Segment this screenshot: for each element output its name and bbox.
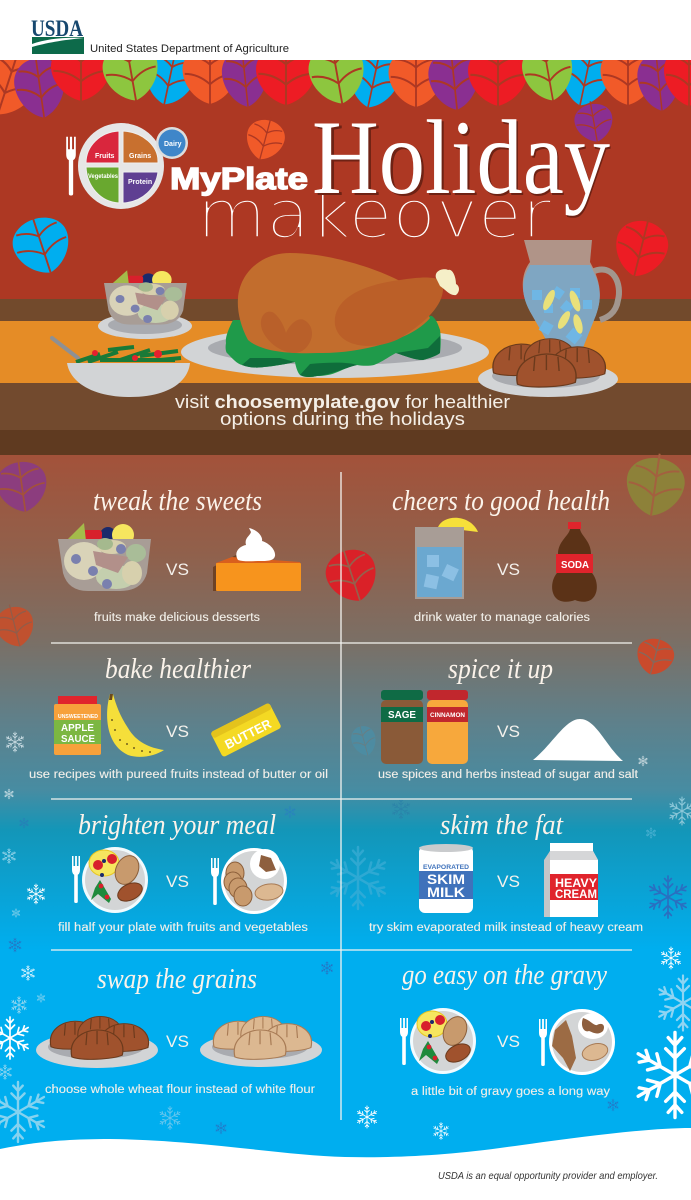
tip: tweak the sweets (58, 485, 301, 624)
vs: VS (166, 722, 189, 741)
dairy cup (156, 127, 188, 159)
caption: use recipes with pureed fruits instead of butter or oil (29, 769, 328, 781)
scattered hero leaves (5, 98, 674, 282)
department name: United States Department of Agriculture (90, 43, 289, 55)
vs: VS (497, 1032, 520, 1051)
bone (436, 269, 459, 295)
hero panel (0, 34, 691, 455)
fruit salad dish (98, 270, 192, 339)
dairy cup: Dairy (164, 141, 182, 148)
icon: white flour rolls (200, 1016, 322, 1067)
vs: VS (497, 872, 520, 891)
icon: apple sauce jar: APPLE (61, 722, 94, 734)
plate: Grains (129, 153, 151, 160)
tips panel background (0, 455, 691, 1157)
icon: soda bottle (552, 522, 597, 602)
caption: try skim evaporated milk instead of heavy cream (369, 922, 643, 934)
tip: go easy on the gravy (400, 959, 615, 1098)
title: makeover: makeover (197, 176, 552, 253)
heading: go easy on the gravy (402, 959, 607, 991)
tip: swap the grains (36, 963, 322, 1096)
lettuce (226, 316, 441, 377)
rolls plate (478, 339, 618, 397)
decorative leaves in tips panel (0, 450, 688, 759)
icon: apple sauce jar (54, 696, 101, 755)
icon: butter stick: BUTTER (222, 716, 274, 752)
icon: plate with little gravy (400, 1008, 476, 1074)
snowflakes (0, 732, 691, 1142)
icon: cinnamon jar (427, 690, 468, 764)
footer note: USDA is an equal opportunity provider and employer. (438, 1170, 658, 1182)
icon: heavy cream carton (544, 843, 598, 917)
ice and lemons (532, 286, 592, 344)
tip: skim the fat (369, 809, 643, 934)
icon: water glass (415, 518, 478, 599)
turkey platter (181, 253, 489, 378)
heading: bake healthier (105, 653, 252, 685)
heading: spice it up (448, 653, 553, 685)
USDA logo (31, 16, 84, 54)
icon: fruit bowl (58, 523, 151, 591)
caption: a little bit of gravy goes a long way (411, 1086, 610, 1098)
call to action text: options during the holidays (220, 408, 465, 429)
vs: VS (166, 560, 189, 579)
USDA header (31, 16, 289, 55)
caption: choose whole wheat flour instead of white flour (45, 1084, 315, 1096)
vs: VS (166, 1032, 189, 1051)
title: Holiday: Holiday (315, 101, 611, 218)
call to action text: visit choosemyplate.gov for healthier (175, 391, 510, 412)
call to action text (175, 391, 510, 429)
icon: heavy plate (211, 848, 287, 914)
caption: use spices and herbs instead of sugar and salt (378, 769, 639, 781)
icon: whole wheat rolls (36, 1016, 158, 1068)
turkey wing (261, 312, 312, 353)
icon: cinnamon jar: CINNAMON (430, 712, 465, 719)
green bean bowl (52, 338, 190, 397)
caption: drink water to manage calories (414, 612, 590, 624)
vs: VS (166, 872, 189, 891)
USDA logo: USDA (31, 16, 83, 41)
caption: fruits make delicious desserts (94, 612, 260, 624)
icon: skim milk can: EVAPORATED (423, 864, 469, 871)
leaf garland (0, 60, 691, 118)
water pitcher (523, 240, 619, 350)
icon: butter stick (210, 703, 282, 757)
icon: skim milk can: MILK (427, 885, 465, 900)
table stripes background (0, 60, 691, 455)
vs: VS (497, 722, 520, 741)
plate (78, 123, 164, 209)
heading: skim the fat (440, 809, 564, 841)
turkey body (238, 253, 430, 353)
icon: apple sauce jar: UNSWEETENED (58, 714, 98, 720)
tip: bake healthier (29, 653, 328, 781)
icon: heavy cream carton: HEAVY (555, 876, 597, 890)
tip: cheers to good health (392, 485, 610, 624)
tip: spice it up (378, 653, 639, 781)
grid dividers (51, 472, 632, 1120)
heading: brighten your meal (78, 809, 276, 841)
icon: skim milk can (419, 844, 473, 913)
icon: skim milk can: SKIM (427, 872, 465, 887)
icon: heavy cream carton: CREAM (555, 887, 597, 901)
tip: brighten your meal (58, 809, 308, 934)
icon: balanced plate (72, 847, 148, 913)
plate: Vegetables (88, 174, 119, 180)
icon: sage jar: SAGE (388, 709, 416, 721)
icon: apple sauce jar: SAUCE (61, 733, 95, 745)
icon: plate with lots of gravy (539, 1009, 615, 1075)
icon: banana (107, 694, 164, 757)
plate: Fruits (95, 153, 115, 160)
heading: cheers to good health (392, 485, 610, 517)
caption: fill half your plate with fruits and vegetables (58, 922, 308, 934)
title: Holiday: Holiday (312, 99, 610, 216)
plate: Protein (128, 179, 152, 186)
heading: swap the grains (97, 963, 257, 995)
heading: tweak the sweets (93, 485, 262, 517)
icon: sage jar (381, 690, 423, 764)
icon: soda bottle: SODA (561, 560, 589, 571)
MyPlate logo (66, 123, 308, 209)
MyPlate wordmark: MyPlate (170, 161, 308, 196)
vs: VS (497, 560, 520, 579)
icon: pumpkin pie (213, 528, 301, 591)
icon: sugar and salt pile (533, 719, 623, 761)
icon: fork (66, 137, 76, 196)
drumstick (335, 278, 443, 346)
